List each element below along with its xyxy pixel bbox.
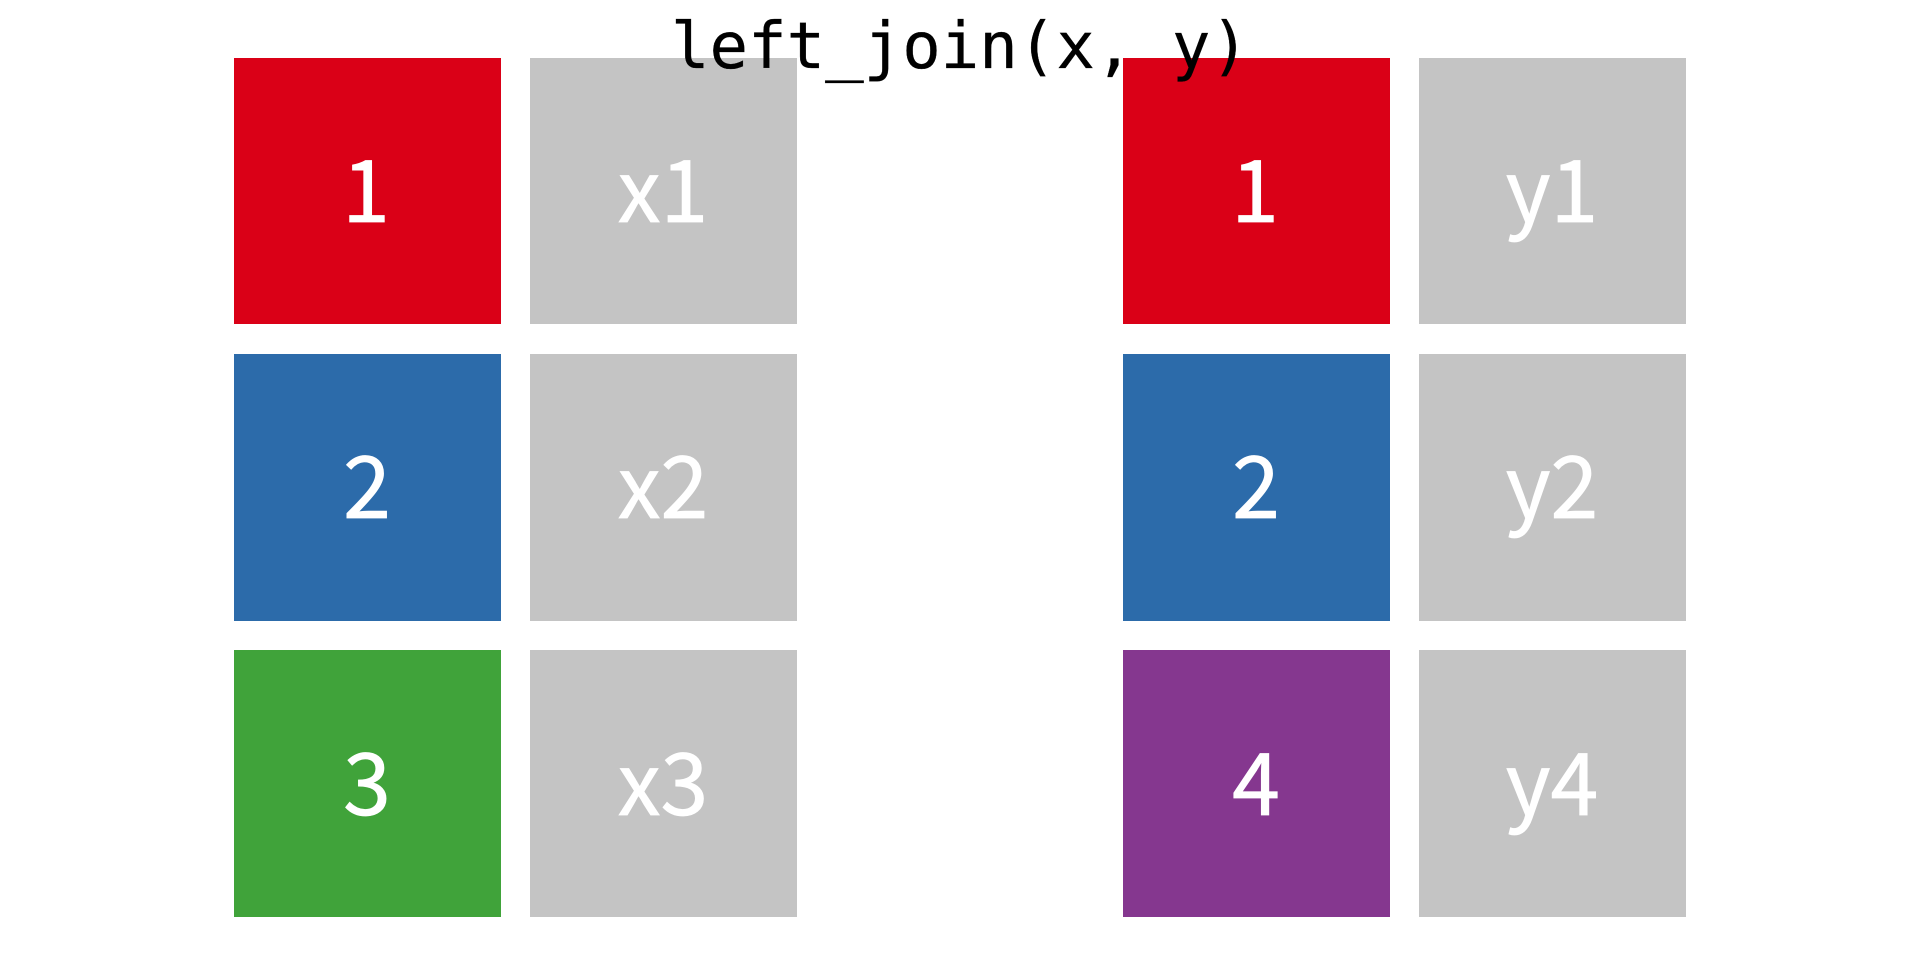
cell: key 2 [234,354,501,621]
cell: key 2: 2 [343,418,391,543]
cell: x3 [530,650,797,917]
cell: key 4 [1123,650,1390,917]
cell: y4 [1419,650,1686,917]
cell: x1 [530,58,797,324]
cell: y2: y2 [1506,418,1598,543]
cell: key 1 [1123,58,1390,324]
title: left_join(x, y) [671,10,1249,84]
cell: y1: y1 [1506,122,1598,247]
cell: x2 [530,354,797,621]
cell: key 2: 2 [1232,418,1280,543]
table y [1123,58,1686,917]
cell: key 3: 3 [343,715,391,840]
cell: y4: y4 [1506,715,1598,840]
cell: x1: x1 [618,122,708,247]
cell: key 1 [234,58,501,324]
cell: x3: x3 [618,715,708,840]
cell: key 2 [1123,354,1390,621]
cell: key 1: 1 [1231,122,1279,247]
cell: y2 [1419,354,1686,621]
cell: key 4: 4 [1232,715,1280,840]
cell: x2: x2 [618,418,708,543]
cell: y1 [1419,58,1686,324]
cell: key 3 [234,650,501,917]
cell: key 1: 1 [342,122,390,247]
table x [234,58,797,917]
